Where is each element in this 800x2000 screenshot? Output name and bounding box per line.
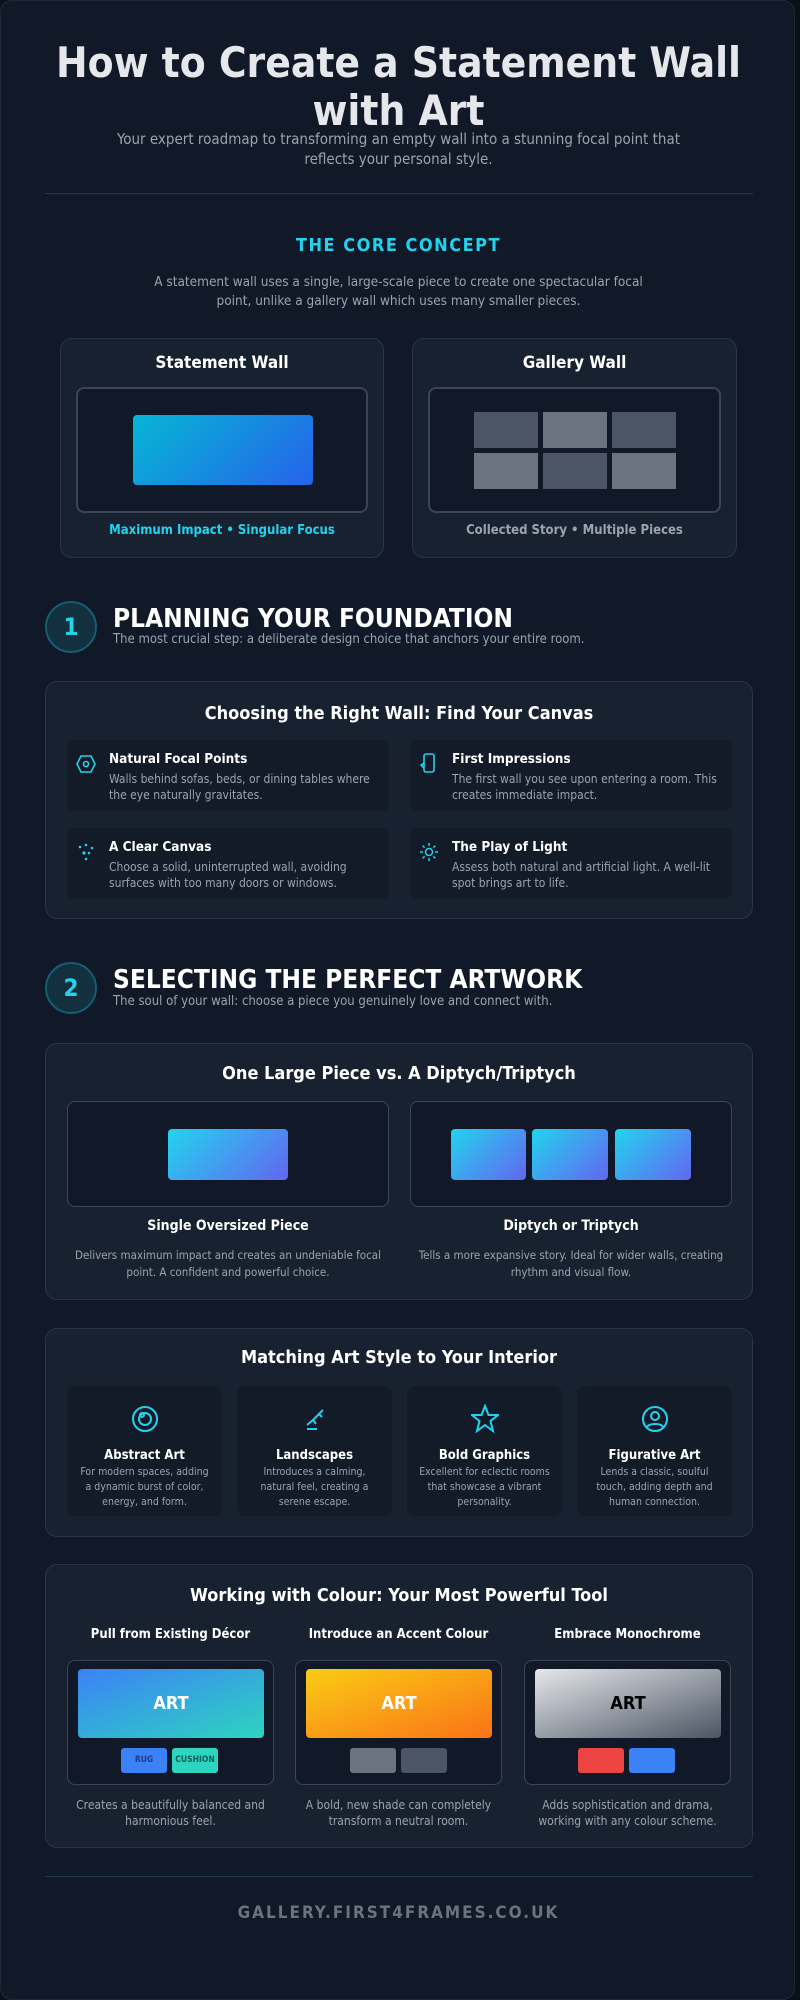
panel: matching art style: Introduces a calming, natural feel, creating a serene escape. — [261, 1466, 368, 1508]
panel: matching art style — [45, 1328, 753, 1537]
panel: matching art style: For modern spaces, adding a dynamic burst of color, energy, and form. — [80, 1466, 209, 1508]
panel: gallery wall: Collected Story • Multiple Pieces — [466, 523, 683, 538]
core concept heading: THE CORE CONCEPT — [296, 235, 501, 256]
panel: statement wall: Maximum Impact • Singular Focus — [109, 523, 335, 538]
section 1 header: PLANNING YOUR FOUNDATION — [113, 604, 513, 634]
section 2 header: The soul of your wall: choose a piece you genuinely love and connect with. — [113, 994, 552, 1009]
panel: choosing the right wall: Walls behind sofas, beds, or dining tables where the eye naturally gravitates. — [109, 772, 370, 802]
panel: choosing the right wall: The first wall you see upon entering a room. This creates immediate impact. — [452, 772, 717, 802]
panel: one large vs diptych: One Large Piece vs. A Diptych/Triptych — [222, 1063, 576, 1084]
column 3: Embrace Monochrome — [554, 1627, 701, 1642]
panel: working with colour: CUSHION — [175, 1755, 215, 1765]
panel: working with colour: Adds sophistication and drama, working with any colour scheme. — [538, 1798, 717, 1828]
panel: choosing the right wall: Choose a solid, uninterrupted wall, avoiding surfaces with too many doors or windows. — [109, 860, 347, 890]
panel: working with colour: ART — [610, 1693, 646, 1714]
panel: gallery wall — [412, 338, 737, 558]
panel: matching art style: Excellent for eclectic rooms that showcase a vibrant personality. — [419, 1466, 550, 1508]
panel: matching art style: Lends a classic, soulful touch, adding depth and human connection. — [596, 1466, 713, 1508]
panel: working with colour: RUG — [135, 1755, 153, 1765]
panel: choosing the right wall: The Play of Light — [452, 839, 567, 855]
panel: matching art style: Landscapes — [276, 1448, 353, 1463]
section 2 header: SELECTING THE PERFECT ARTWORK — [113, 965, 582, 995]
panel: matching art style: Bold Graphics — [439, 1448, 530, 1463]
column 2: Introduce an Accent Colour — [309, 1627, 488, 1642]
panel: matching art style: Matching Art Style to Your Interior — [241, 1347, 557, 1368]
section 1 header: The most crucial step: a deliberate design choice that anchors your entire room. — [113, 632, 584, 647]
section 1 header: 1 — [63, 613, 79, 641]
panel: one large vs diptych — [45, 1043, 753, 1300]
panel: choosing the right wall: A Clear Canvas — [109, 839, 211, 855]
panel: working with colour: ART — [381, 1693, 417, 1714]
panel: matching art style: Abstract Art — [104, 1448, 185, 1463]
panel: choosing the right wall — [45, 681, 753, 919]
column 1: Pull from Existing Décor — [91, 1627, 250, 1642]
panel: matching art style: Figurative Art — [608, 1448, 700, 1463]
panel: choosing the right wall: Assess both natural and artificial light. A well-lit spot brings art to life. — [452, 860, 710, 890]
panel: one large vs diptych: Delivers maximum impact and creates an undeniable focal point. A confident and powerful choice. — [75, 1248, 381, 1279]
subtitle: Your expert roadmap to transforming an empty wall into a stunning focal point that reflects your personal style. — [117, 130, 680, 168]
panel: choosing the right wall: Choosing the Right Wall: Find Your Canvas — [205, 703, 593, 724]
panel: working with colour: A bold, new shade can completely transform a neutral room. — [306, 1798, 491, 1828]
panel: working with colour: ART — [153, 1693, 189, 1714]
section 2 header: 2 — [63, 974, 79, 1002]
footer: GALLERY.FIRST4FRAMES.CO.UK — [238, 1903, 559, 1923]
panel: working with colour — [45, 1564, 753, 1848]
panel: working with colour: Creates a beautifully balanced and harmonious feel. — [76, 1798, 265, 1828]
section 2 header — [45, 962, 583, 1014]
panel: choosing the right wall: Natural Focal Points — [109, 751, 247, 767]
title: How to Create a Statement Wall — [56, 38, 741, 87]
title: with Art — [313, 86, 484, 135]
panel: one large vs diptych: Tells a more expansive story. Ideal for wider walls, creating rhythm and visual flow. — [419, 1248, 723, 1279]
section 1 header — [45, 601, 584, 653]
panel: statement wall: Statement Wall — [155, 353, 289, 373]
panel: one large vs diptych: Single Oversized Piece — [147, 1218, 309, 1234]
panel: one large vs diptych: Diptych or Triptych — [503, 1218, 639, 1234]
panel: working with colour: Working with Colour: Your Most Powerful Tool — [190, 1585, 608, 1606]
panel: gallery wall: Gallery Wall — [523, 353, 626, 373]
panel: statement wall — [60, 338, 384, 558]
panel: choosing the right wall: First Impressions — [452, 751, 571, 767]
core concept text: A statement wall uses a single, large-scale piece to create one spectacular focal point, unlike a gallery wall which uses many smaller pieces. — [154, 274, 643, 309]
title — [56, 38, 741, 135]
